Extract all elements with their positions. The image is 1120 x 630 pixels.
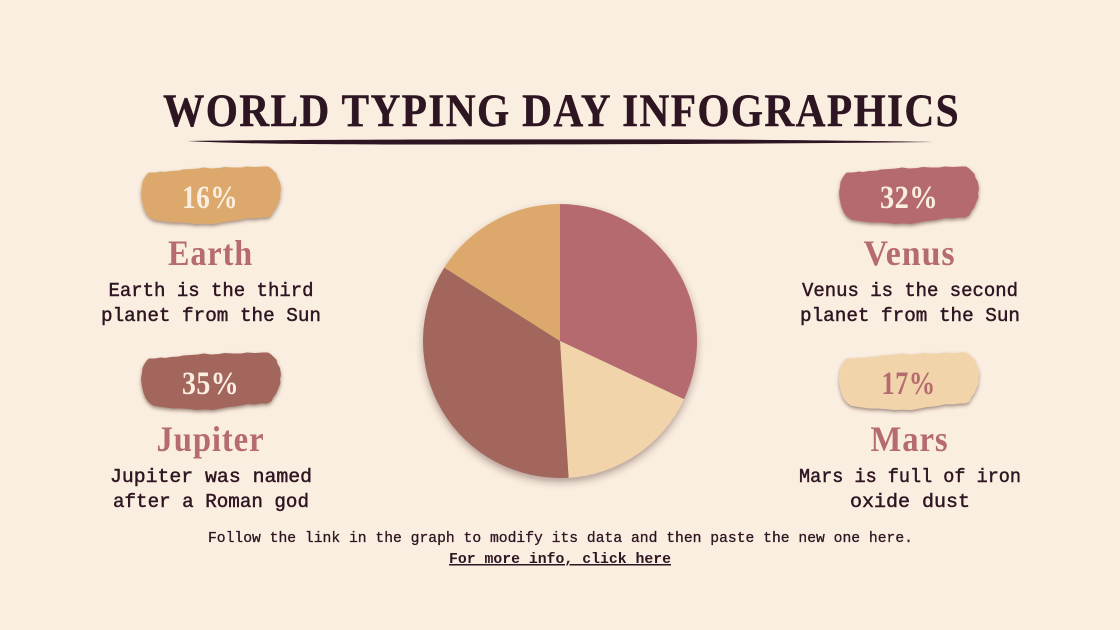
description: Mars: oxide dust xyxy=(850,491,970,513)
panel: Mars xyxy=(799,353,1021,513)
slice: Jupiter 35% xyxy=(423,268,569,478)
torn paper badge: Jupiter xyxy=(142,353,280,410)
description: Earth xyxy=(101,280,321,327)
slice: Earth 16% xyxy=(444,204,560,341)
torn paper badge: Earth xyxy=(142,167,280,224)
footer note: Follow the link in the graph to modify its data and then paste the new one here. xyxy=(208,531,913,547)
heading: Earth: Earth xyxy=(168,233,253,273)
description: Venus: planet from the Sun xyxy=(800,305,1020,327)
description: Earth: planet from the Sun xyxy=(101,305,321,327)
slice: Venus 32% xyxy=(560,204,697,399)
heading: Mars: Mars xyxy=(870,419,948,459)
slice: Mars 17% xyxy=(560,341,684,478)
title: WORLD TYPING DAY INFOGRAPHICS xyxy=(163,85,960,137)
footer link: For more info, click here xyxy=(449,551,671,568)
panel: Jupiter xyxy=(110,353,312,513)
panel: Venus xyxy=(800,167,1020,327)
torn paper badge: Mars xyxy=(840,353,978,410)
description: Mars: Mars is full of iron xyxy=(799,466,1021,488)
percentage: 16%: 16% xyxy=(182,180,238,216)
description: Jupiter xyxy=(110,466,312,513)
pie chart xyxy=(423,204,697,478)
torn paper badge: Venus xyxy=(840,167,978,224)
heading: Jupiter: Jupiter xyxy=(156,419,264,459)
heading: Venus: Venus xyxy=(864,233,956,273)
description: Venus: Venus is the second xyxy=(802,280,1018,302)
panel: Earth xyxy=(101,167,321,327)
description: Jupiter: after a Roman god xyxy=(113,491,309,513)
description: Jupiter: Jupiter was named xyxy=(110,466,312,488)
title underline xyxy=(187,139,933,145)
description: Mars xyxy=(799,466,1021,513)
description: Venus xyxy=(800,280,1020,327)
percentage: 17%: 17% xyxy=(882,366,936,402)
description: Earth: Earth is the third xyxy=(108,280,314,302)
percentage: 32%: 32% xyxy=(880,180,938,216)
percentage: 35%: 35% xyxy=(182,366,239,402)
